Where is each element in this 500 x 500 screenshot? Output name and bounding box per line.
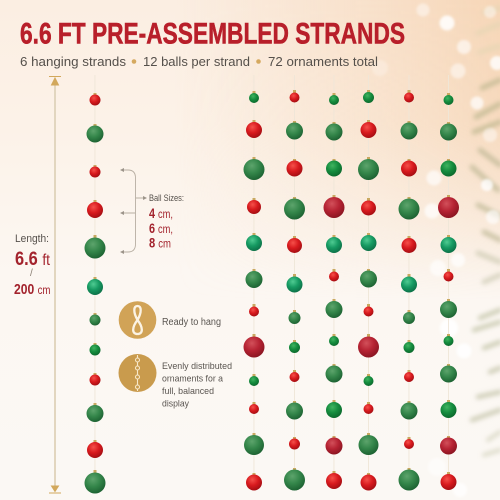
- bokeh lights: [372, 4, 500, 497]
- length label: [14, 233, 50, 298]
- strand 5: [398, 75, 420, 490]
- subtitle: 72 ornaments total: [268, 55, 378, 69]
- strand 3: [324, 75, 344, 489]
- text: evenly distributed: full, balanced: [162, 386, 214, 397]
- strand 1: [244, 75, 264, 490]
- length label: 6.6 ft: [15, 249, 50, 270]
- background: [0, 0, 500, 274]
- sample strand: [84, 75, 106, 494]
- icon: loop hanger: [119, 301, 156, 339]
- icon: chain: [118, 354, 156, 392]
- text: evenly distributed: [162, 361, 232, 410]
- subtitle: 6 hanging strands: [20, 55, 126, 69]
- length label: 200 cm: [14, 281, 50, 298]
- text: evenly distributed: ornaments for a: [162, 374, 224, 384]
- strand 6: [438, 75, 459, 490]
- strand 2: [284, 75, 305, 490]
- ball sizes label: 6 cm,: [149, 220, 173, 236]
- subtitle: 12 balls per strand: [143, 55, 250, 69]
- ball sizes label: [149, 193, 184, 250]
- text: evenly distributed: display: [162, 398, 189, 410]
- blurred christmas tree: [472, 8, 500, 455]
- length label: /: [30, 268, 33, 279]
- length label: Length:: [15, 233, 49, 245]
- ball sizes label: Ball Sizes:: [149, 193, 184, 203]
- ball sizes label: 4 cm,: [149, 205, 173, 221]
- text: ready to hang: Ready to hang: [162, 317, 221, 328]
- ball sizes bracket: [120, 168, 147, 254]
- strand 4: [358, 75, 379, 490]
- ball sizes label: 8 cm: [149, 234, 171, 250]
- text: evenly distributed: Evenly distributed: [162, 361, 232, 372]
- length arrow: [49, 76, 61, 493]
- subtitle: [20, 55, 378, 69]
